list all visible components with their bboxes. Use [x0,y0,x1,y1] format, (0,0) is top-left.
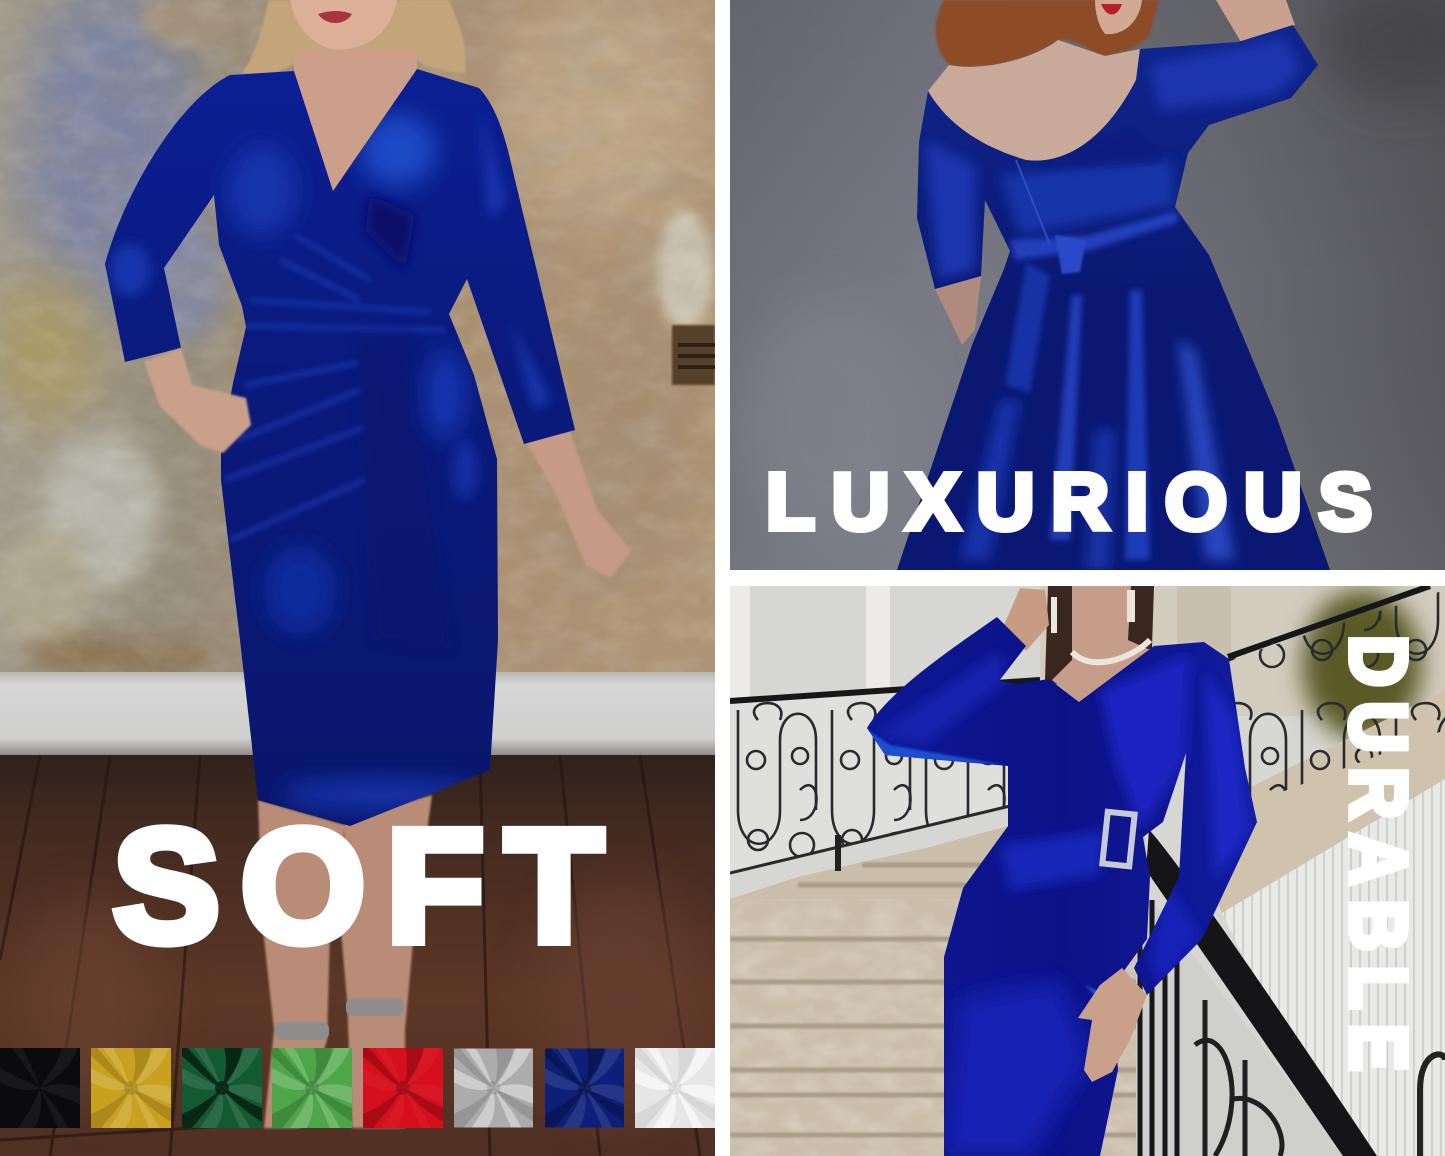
fabric colour swatches [0,1048,715,1128]
pearl necklace and earrings [1054,590,1150,662]
label: SOFT: SOFT [113,796,603,975]
neck and bare back [928,40,1140,161]
swatch: silver [454,1048,533,1128]
right stairs [1205,690,1445,913]
panel: durable velvet dress photo [730,586,1445,1156]
swatch: dark green [182,1048,262,1128]
swatch: mustard [91,1048,171,1128]
panel: luxurious velvet dress photo [730,0,1445,570]
black banister [1146,830,1377,1156]
cream stairs [730,826,1150,1156]
swatch: royal blue [545,1048,624,1128]
off-shoulder velvet gown [897,25,1330,570]
blue velvet long-sleeve dress [867,617,1257,1156]
swatch: light green [272,1048,352,1128]
iron balustrade below banister [1136,899,1445,1156]
auburn hair [936,0,1159,67]
plant [1302,590,1422,740]
face and lips [1095,0,1142,34]
label: LUXURIOUS: LUXURIOUS [766,457,1372,546]
curved white stair wall [1222,779,1445,1156]
lower hand [1078,968,1147,1082]
woman's legs [258,795,432,1128]
iron railing left [730,680,1040,873]
rhinestone buckle [1102,812,1135,866]
hair and face [242,0,465,75]
blue velvet wrap dress [105,69,575,826]
raised arm [1216,0,1295,42]
neck and raised hand [1004,586,1150,702]
wooden floor [0,755,715,1156]
white panelled wall [730,586,1445,1156]
swatch: white [635,1048,715,1128]
arm at side [935,276,981,345]
swatch: red [363,1048,443,1128]
label: DURABLE: DURABLE [1333,635,1422,1072]
plaster wall [0,0,715,675]
right arm and hand [525,432,631,578]
neck and chest [294,50,417,195]
ankle straps [275,998,404,1040]
left arm and hand on hip [144,348,251,453]
woman's hair [1045,586,1154,690]
baseboard [0,672,715,755]
grey studio backdrop [730,0,1445,570]
iron railing right [1228,586,1445,806]
panel: soft velvet dress photo [0,0,715,1156]
swatch: black [0,1048,80,1128]
